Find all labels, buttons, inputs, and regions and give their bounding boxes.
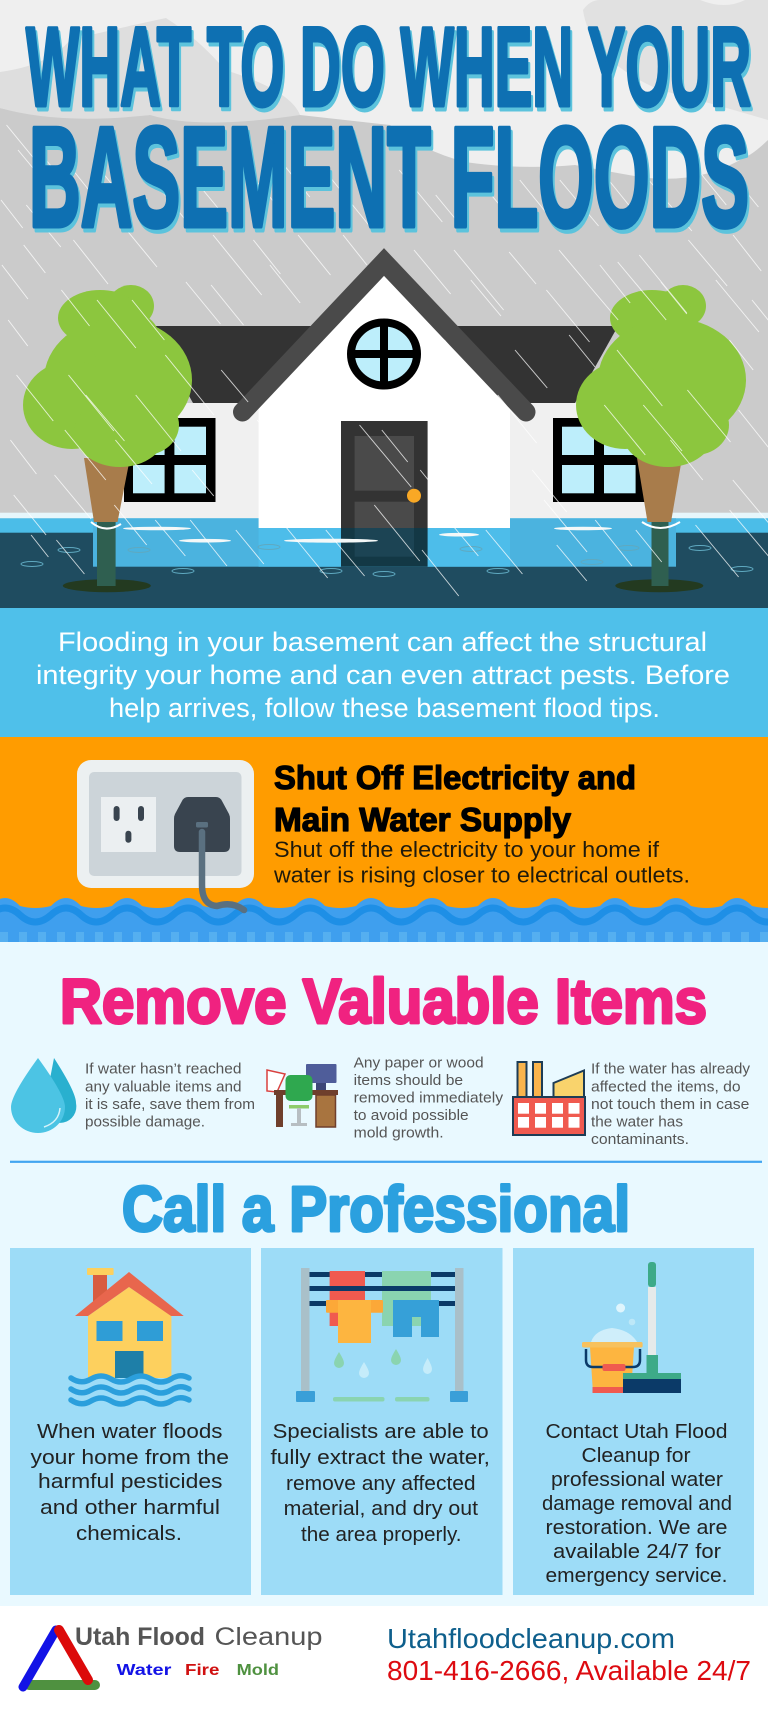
puddle highlights	[123, 527, 612, 543]
text: tip 2: mold growth.	[354, 1124, 444, 1141]
icon: left window	[124, 418, 216, 502]
text: tip 2: Any paper or wood	[354, 1054, 484, 1071]
body text	[273, 837, 690, 888]
tree left	[23, 285, 192, 592]
card text: chemicals.	[76, 1522, 182, 1545]
phone: 801-416-2666, Available 24/7	[387, 1655, 751, 1686]
text: tip 3: the water has	[591, 1114, 683, 1131]
logo services	[117, 1662, 279, 1679]
icon: factory	[513, 1062, 585, 1135]
card text: the area properly.	[301, 1523, 462, 1546]
text: tip 2	[354, 1054, 504, 1141]
card text: material, and dry out	[284, 1497, 478, 1520]
card text: Specialists are able to	[273, 1420, 489, 1443]
card text: harmful pesticides	[38, 1470, 222, 1493]
gable roof	[242, 262, 526, 412]
icon: right window	[553, 418, 645, 502]
logo triangle	[23, 1630, 95, 1687]
title	[26, 4, 751, 257]
heading: Main Water Supply	[274, 801, 572, 838]
text: tip 1: If water hasn’t reached	[85, 1060, 242, 1077]
heading	[274, 759, 636, 838]
text: tip 2: to avoid possible	[354, 1107, 469, 1124]
body text: water is rising closer to electrical outlets.	[273, 863, 690, 888]
card text: your home from the	[30, 1446, 229, 1469]
panel: footer	[0, 1606, 768, 1710]
card text: Contact Utah Flood	[546, 1421, 728, 1443]
card text: When water floods	[37, 1420, 222, 1443]
card text: emergency service.	[546, 1565, 728, 1587]
card text	[270, 1420, 490, 1546]
body text: Shut off the electricity to your home if	[274, 837, 660, 862]
text: tip 1	[85, 1060, 255, 1131]
card text: available 24/7 for	[553, 1541, 721, 1563]
text: tip 3: not touch them in case	[591, 1096, 749, 1113]
water ripples	[21, 544, 753, 576]
panel: introduction	[0, 608, 768, 737]
text: tip 1: any valuable items and	[85, 1079, 241, 1096]
rain	[0, 125, 768, 596]
icon: water drops	[11, 1058, 76, 1133]
tree ties	[91, 522, 680, 529]
door	[341, 421, 428, 567]
house front	[259, 276, 510, 528]
icon: mop and bucket	[582, 1262, 681, 1393]
icon: flooded house	[71, 1268, 189, 1404]
text: tip 3: If the water has already	[591, 1060, 751, 1077]
card: specialists	[261, 1248, 502, 1595]
card text: fully extract the water,	[270, 1446, 490, 1469]
card text: professional water	[551, 1469, 723, 1491]
logo services: Fire	[185, 1662, 220, 1679]
card text	[542, 1421, 732, 1587]
card: contact	[513, 1248, 754, 1595]
card text: Cleanup for	[582, 1445, 691, 1467]
tree right	[576, 285, 746, 592]
card text: damage removal and	[542, 1493, 732, 1515]
house side roof	[150, 326, 618, 403]
website: Utahfloodcleanup.com	[387, 1623, 675, 1654]
card text: restoration. We are	[546, 1517, 728, 1539]
logo services: Water	[117, 1662, 171, 1679]
heading: remove valuable items: Remove Valuable Items	[60, 967, 707, 1037]
icon: wall outlet and plug	[77, 760, 254, 910]
text: tip 1: possible damage.	[85, 1114, 205, 1131]
text: tip 1: it is safe, save them from	[85, 1096, 255, 1113]
text: tip 3	[591, 1060, 751, 1148]
panel: introduction: help arrives, follow these basement flood tips.	[109, 693, 660, 723]
icon: round window	[350, 320, 418, 388]
waves	[0, 898, 768, 942]
icon: desk	[267, 1064, 338, 1127]
card text: remove any affected	[286, 1472, 476, 1495]
text: tip 3: contaminants.	[591, 1131, 689, 1148]
icon: drying rack	[296, 1268, 468, 1402]
logo name	[75, 1623, 322, 1651]
card text: and other harmful	[40, 1496, 220, 1519]
logo services: Mold	[237, 1662, 279, 1679]
flood water	[0, 513, 768, 608]
panel: shut off electricity	[0, 737, 768, 942]
text: tip 3: affected the items, do	[591, 1079, 741, 1096]
house side wall	[120, 403, 648, 519]
panel: introduction: integrity your home and can even attract pests. Before	[36, 660, 730, 690]
panel: remove valuable items and call a professional	[0, 942, 768, 1606]
card: outside flooding	[10, 1248, 251, 1595]
text: tip 2: items should be	[354, 1072, 463, 1089]
logo name: Utah Flood	[75, 1623, 205, 1651]
panel: introduction: Flooding in your basement can affect the structural	[58, 627, 707, 657]
heading: call a professional: Call a Professional	[122, 1173, 630, 1245]
text: tip 2: removed immediately	[354, 1089, 504, 1106]
heading: Shut Off Electricity and	[274, 759, 636, 796]
logo name: Cleanup	[214, 1623, 322, 1651]
card text	[30, 1420, 229, 1545]
panel: flooded house scene	[0, 0, 768, 608]
